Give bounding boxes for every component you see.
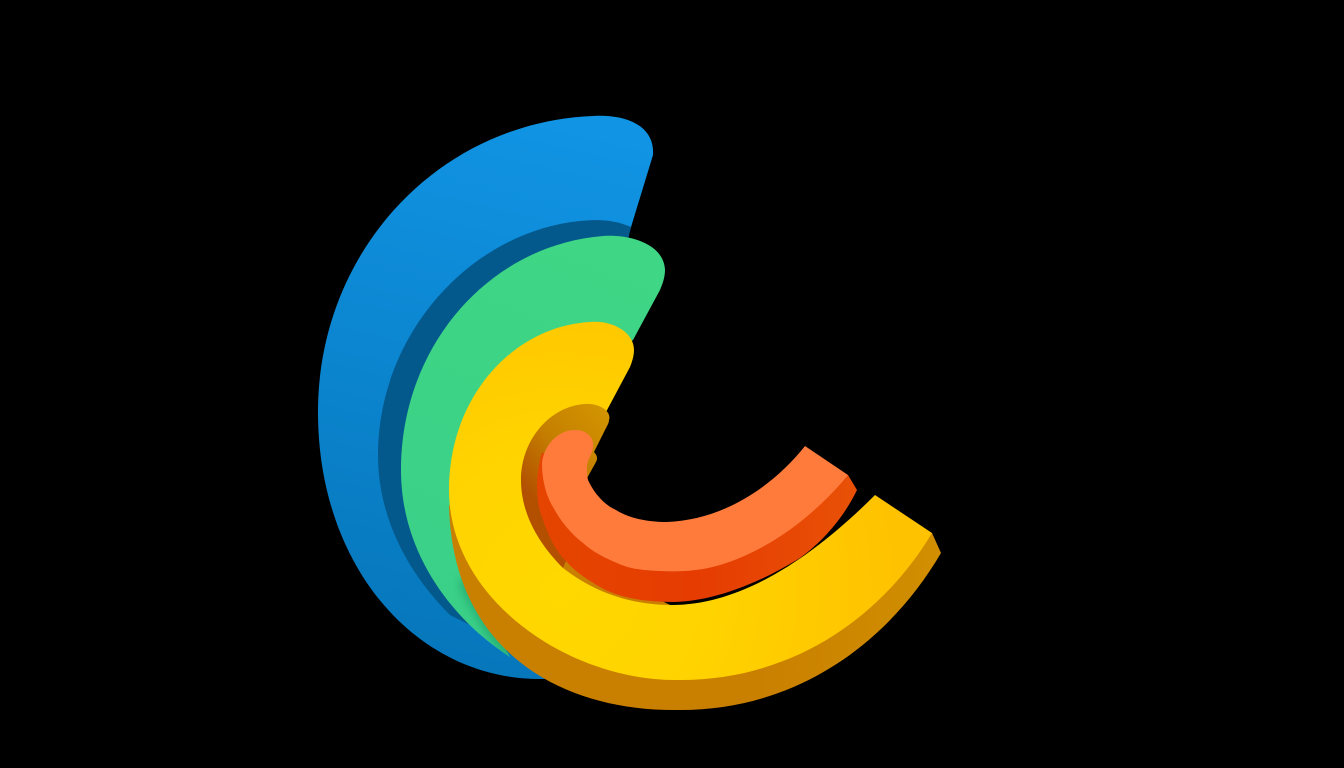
yellow inner shadow [521, 404, 609, 568]
yellow arc side [449, 505, 941, 710]
logo: layered colourful crescent arcs [318, 116, 941, 710]
blue arc [318, 116, 653, 679]
blue arc shadow [378, 220, 631, 640]
green arc [401, 236, 665, 657]
orange arc side [537, 452, 857, 602]
orange arc [542, 430, 848, 571]
yellow arc [449, 322, 932, 680]
green arc soft shade [463, 580, 513, 657]
